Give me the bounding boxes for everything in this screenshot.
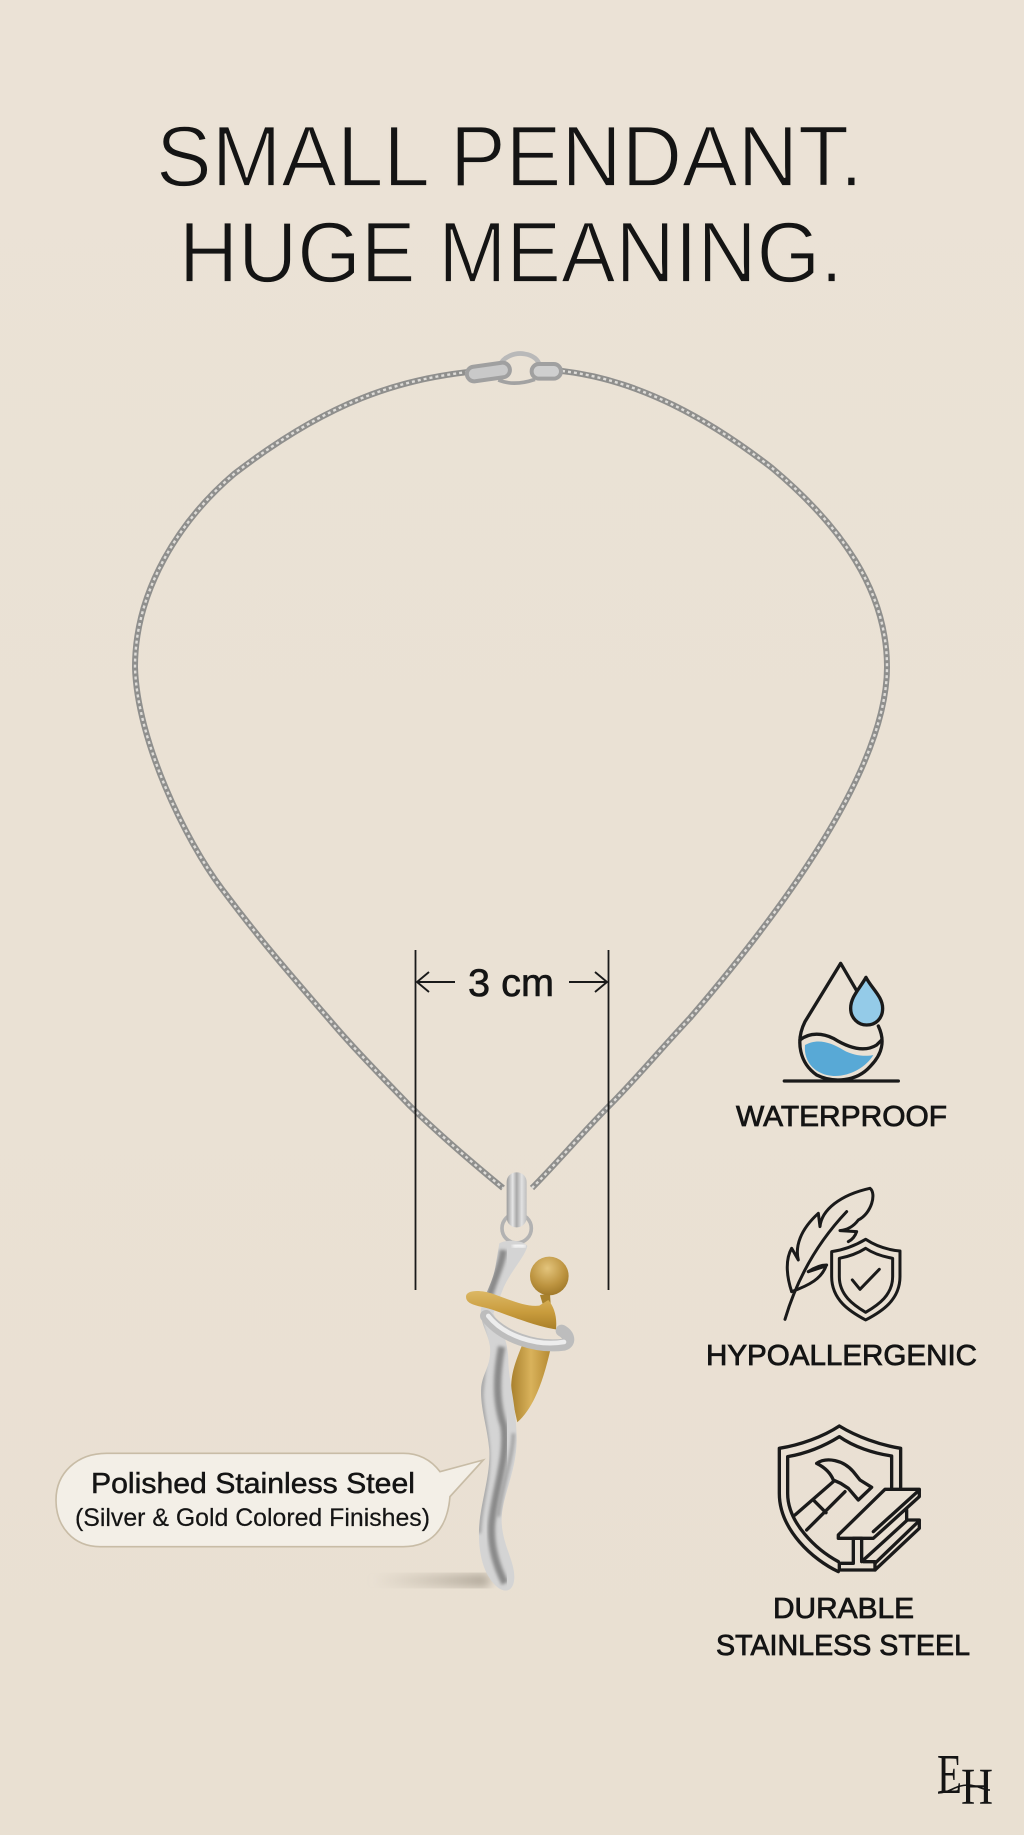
pendant bail — [507, 1172, 527, 1227]
gold torso — [511, 1342, 551, 1422]
callout text: Polished Stainless Steel — [91, 1468, 415, 1500]
icon: shield, hammer and steel beam — [779, 1426, 919, 1572]
label: hypoallergenic: HYPOALLERGENIC — [706, 1340, 977, 1372]
icon: waterproof — [784, 963, 898, 1081]
title: SMALL PENDANT. — [156, 109, 863, 205]
silver body — [479, 1241, 527, 1591]
label: waterproof: WATERPROOF — [736, 1101, 947, 1133]
title — [156, 109, 863, 301]
silver arm — [486, 1316, 568, 1345]
pendant ring — [502, 1214, 531, 1243]
label: durable stainless steel — [716, 1593, 970, 1662]
label: durable stainless steel: DURABLE — [773, 1593, 914, 1625]
clasp — [466, 354, 561, 383]
logo: EH monogram: H — [961, 1759, 993, 1816]
logo: EH monogram — [937, 1744, 993, 1816]
gold head — [530, 1257, 569, 1304]
logo: EH monogram: E — [937, 1744, 962, 1806]
title: HUGE MEANING. — [179, 205, 843, 301]
pendant — [466, 1172, 569, 1591]
label: durable stainless steel: STAINLESS STEEL — [716, 1630, 970, 1662]
callout text — [75, 1468, 430, 1532]
necklace chain — [135, 371, 887, 1188]
dimension marker: 3 cm: 3 cm — [468, 962, 554, 1005]
callout text: (Silver & Gold Colored Finishes) — [75, 1504, 430, 1532]
dimension marker: 3 cm — [416, 950, 608, 1290]
pendant shadow — [372, 1574, 490, 1587]
callout bubble — [56, 1453, 483, 1547]
icon: feather and shield — [785, 1188, 900, 1320]
gold arm — [466, 1291, 556, 1329]
